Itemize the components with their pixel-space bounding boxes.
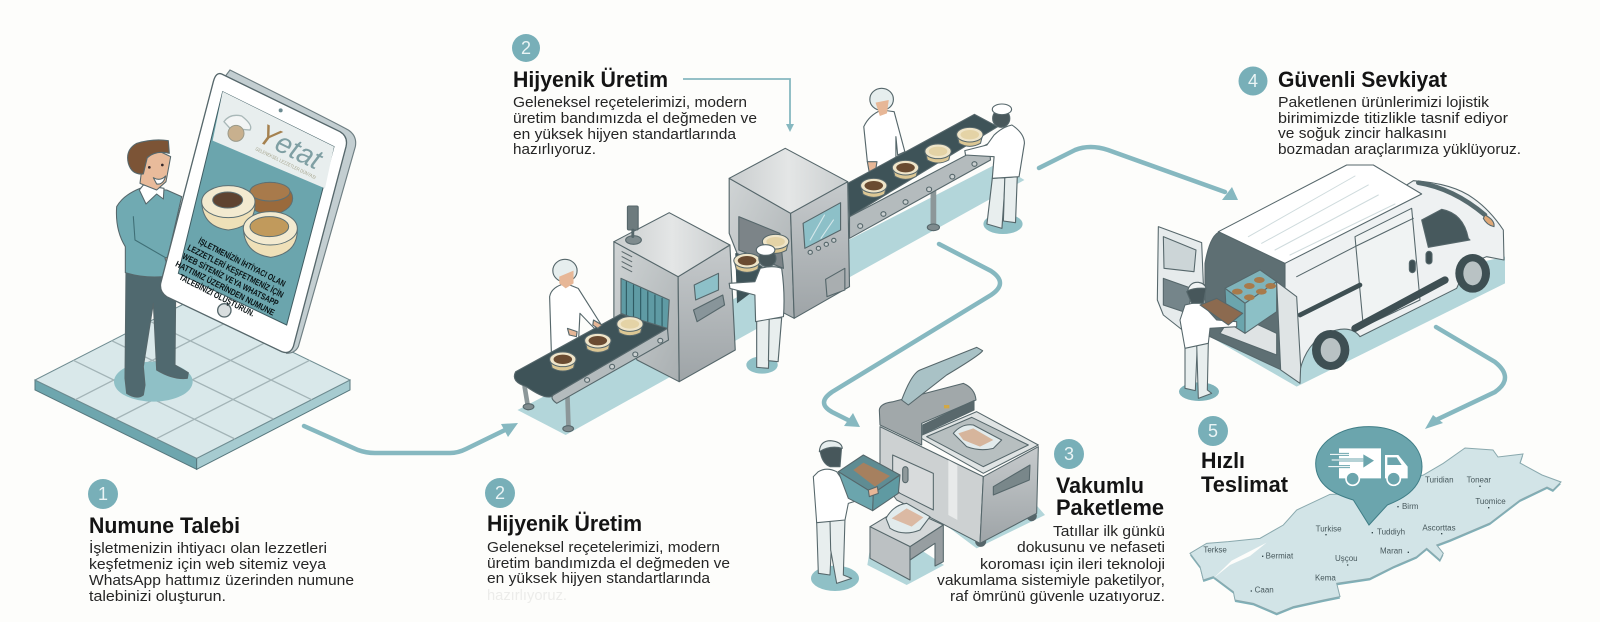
city labels: Tonear [1467, 476, 1491, 485]
city labels: Turidian [1425, 476, 1454, 485]
text block: step 4: Güvenli Sevkiyat [1278, 67, 1448, 92]
text block: step 5 [1198, 416, 1289, 497]
text block: step 2 lower: Geleneksel reçetelerimizi, modern [487, 539, 720, 556]
brand logo: Yetat [253, 118, 328, 177]
crates in cargo bay [1225, 270, 1277, 333]
city labels: Turkise [1316, 525, 1342, 534]
location pin with truck icon [1316, 427, 1422, 525]
panel: step 2 production line [514, 88, 1024, 435]
text block: step 1: talebinizi oluşturun. [89, 588, 226, 605]
text block: step 2 upper [512, 34, 757, 158]
sealed tray on machine [953, 425, 1002, 450]
giant tablet [160, 70, 356, 353]
text block: step 4 [1238, 66, 1521, 158]
machine shadow [943, 502, 1045, 548]
text block: step 1: keşfetmeniz için web sitemiz veya [89, 556, 327, 573]
panel: step 5 delivery map [1190, 427, 1561, 615]
text block: step 3 [937, 439, 1165, 605]
brand logo [224, 115, 328, 181]
arrow: production to vacuum packing [824, 244, 1000, 427]
text block: step 3: Tatıllar ilk günkü [1053, 523, 1165, 540]
text block: step 3: raf ömrünü güvenle uzatıyoruz. [950, 588, 1165, 605]
customer figure [116, 140, 188, 397]
text block: step 2 lower: hazırlıyoruz. [487, 587, 567, 604]
brand logo: GELENEKSEL LEZZETLER DÜNYASI [254, 146, 317, 181]
panel: step 1 illustration, tablet and customer [35, 70, 356, 469]
side table with tray [867, 503, 944, 585]
text block: step 2 upper: Hijyenik Üretim [513, 67, 668, 92]
bowls inside tunnel [734, 234, 789, 272]
map of the region [1190, 448, 1561, 615]
text block: step 4: 4 [1248, 71, 1258, 91]
text block: step 2 upper: hazırlıyoruz. [513, 141, 596, 158]
right rear door [1277, 282, 1301, 383]
text block: step 2 upper: en yüksek hijyen standartlarında [513, 126, 737, 143]
screen caption: TALEBİNİZİ OLUŞTURUN. [178, 272, 256, 319]
city labels: Terkse [1203, 546, 1227, 555]
city labels: Birm [1402, 502, 1419, 511]
text block: step 5: Hızlı [1201, 448, 1245, 473]
bowls on first belt [550, 317, 643, 371]
worker with tray [1179, 282, 1243, 401]
text block: step 1 [88, 479, 354, 605]
tablet screen [169, 92, 334, 327]
text block: step 2 lower [485, 478, 730, 604]
text block: step 2 lower: en yüksek hijyen standartlarında [487, 570, 711, 587]
text block: step 2 lower: Hijyenik Üretim [487, 511, 642, 536]
screen caption: İŞLETMENİZİN İHTİYACI OLAN [197, 236, 287, 289]
text block: step 2 lower: 2 [495, 483, 505, 503]
dessert bowls on screen [202, 182, 297, 257]
arrow: van to delivery map [1425, 327, 1505, 429]
worker in hair net, left [550, 259, 601, 353]
screen caption: LEZZETLERİ KEŞFETMENİZ İÇİN [186, 242, 285, 300]
van shadow [1210, 257, 1505, 387]
tunnel machine 1 with curtains [614, 206, 735, 382]
arrow: heading to production line [683, 79, 794, 132]
text block: step 4: bozmadan araçlarımıza yüklüyoruz. [1278, 141, 1521, 158]
text block: step 4: Paketlenen ürünlerimizi lojistik [1278, 94, 1490, 111]
text block: step 1: İşletmenizin ihtiyacı olan lezzetleri [89, 539, 327, 557]
isometric floor platform [35, 302, 350, 469]
van body [1157, 165, 1504, 372]
text block: step 3: vakumlama sistemiyle paketilyor, [937, 572, 1165, 589]
screen caption: HATTIMIZ ÜZERİNDEN NUMUNE [174, 259, 277, 318]
screen caption [169, 231, 290, 327]
worker in cap, middle [729, 245, 784, 374]
rear conveyor belt [849, 143, 991, 238]
tunnel machine 2 [729, 148, 849, 318]
city labels: Caan [1255, 585, 1274, 594]
arrow: production to van [1039, 147, 1238, 200]
city labels: Tuomice [1475, 497, 1506, 506]
middle conveyor belt [735, 228, 783, 303]
city labels: Uşçou [1335, 554, 1358, 563]
city labels: Bermiat [1266, 552, 1294, 561]
first conveyor belt [514, 314, 668, 432]
text block: step 2 lower: üretim bandımızda el değmeden ve [487, 555, 730, 572]
text block: step 3: koroması için ileri teknoloji [980, 556, 1165, 573]
city labels: Kema [1315, 573, 1336, 582]
city labels: Ascorttas [1422, 523, 1456, 532]
city labels: Tuddiyh [1377, 528, 1405, 537]
floor shadow band [517, 163, 1024, 435]
text block: step 2 upper: 2 [521, 38, 531, 58]
arrow: step 1 to step 2 [304, 423, 518, 453]
text block: step 3: Vakumlu [1056, 473, 1144, 498]
text block: step 3: Paketleme [1056, 495, 1164, 520]
text block: step 1: 1 [98, 484, 108, 504]
text block: step 1: WhatsApp hattımız üzerinden numune [89, 572, 354, 589]
text block: step 4: ve soğuk zincir halkasını [1278, 125, 1447, 142]
panel: step 4 delivery van [1157, 165, 1505, 401]
text block: step 4: birimimizde titizlikle tasnif ediyor [1278, 110, 1508, 127]
city labels: Maran [1380, 546, 1403, 555]
text block: step 2 upper: Geleneksel reçetelerimizi, modern [513, 94, 747, 111]
worker in cap, rear [965, 104, 1024, 234]
screen caption: WEB SİTEMİZ VEYA WHATSAPP [181, 251, 280, 308]
rear belt surface [848, 114, 998, 228]
worker in hair net, rear [864, 88, 905, 172]
text block: step 5: 5 [1208, 421, 1218, 441]
text block: step 3: dokusunu ve nefaseti [1017, 539, 1165, 556]
bowls on rear belt [861, 127, 983, 197]
text block: step 5: Teslimat [1201, 472, 1289, 497]
panel: step 3 vacuum sealing machine [811, 347, 1045, 591]
worker carrying crate [811, 441, 900, 591]
city labels [1203, 476, 1506, 594]
vacuum machine [879, 347, 1038, 546]
text block: step 3: 3 [1064, 444, 1074, 464]
text block: step 2 upper: üretim bandımızda el değmeden ve [513, 110, 757, 127]
text block: step 1: Numune Talebi [89, 513, 240, 538]
van wheels [1312, 254, 1490, 370]
